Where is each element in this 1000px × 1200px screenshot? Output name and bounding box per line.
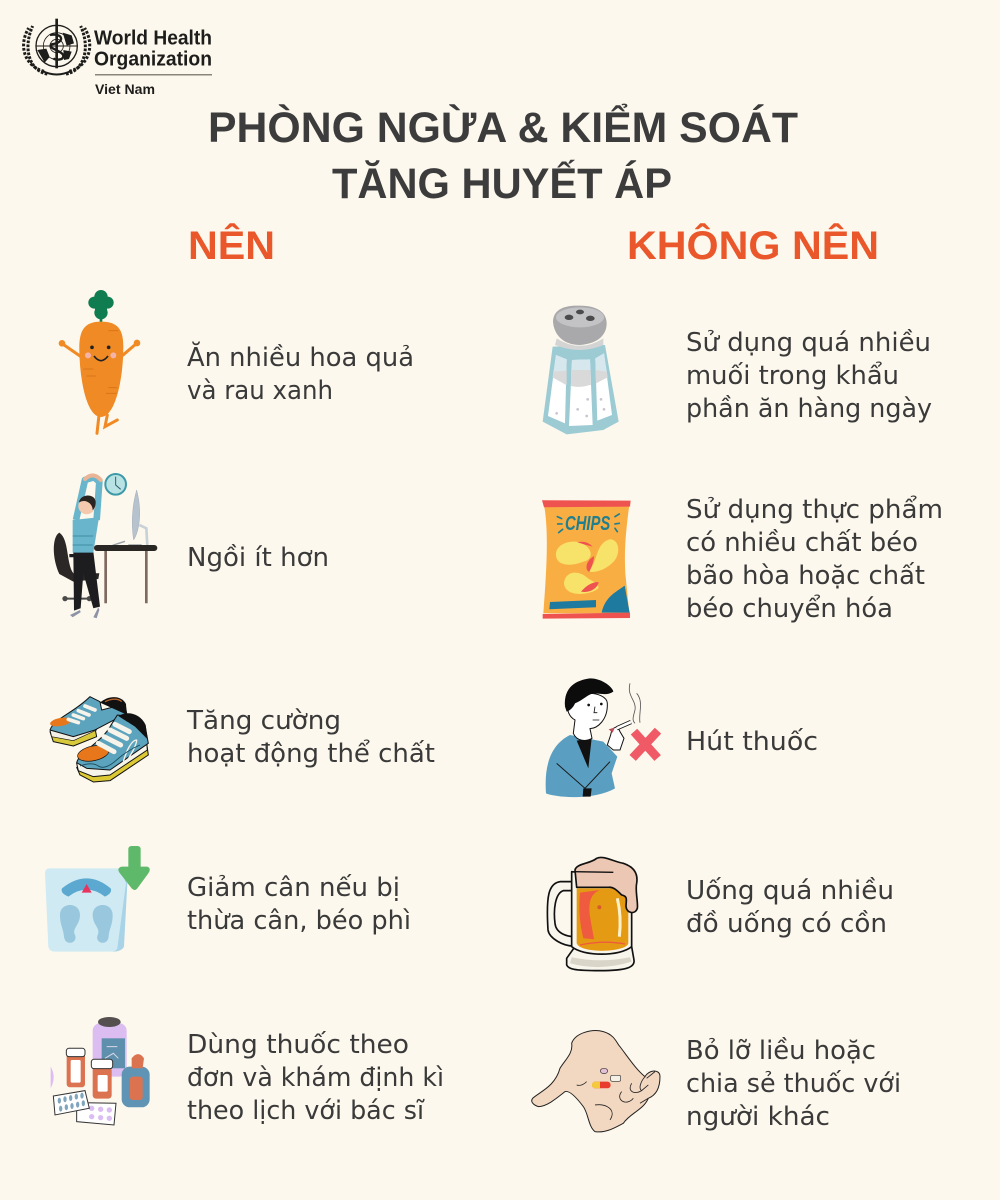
icon: salt shaker (543, 306, 619, 434)
text: eat fruit and vegetables (187, 340, 414, 406)
text: take medicine and check-ups (187, 1030, 444, 1126)
WHO logo: Viet Nam (95, 81, 155, 97)
text: increase physical activity: hoạt động thể chất (187, 738, 435, 769)
text: missed doses or sharing medicine: Bỏ lỡ liều hoặc (686, 1036, 876, 1066)
text: saturated and trans fats: béo chuyển hóa (686, 593, 893, 624)
icon: medicine bottles (51, 1017, 150, 1125)
text: increase physical activity (186, 706, 435, 769)
icon: WHO emblem (24, 19, 90, 74)
text: too much salt: Sử dụng quá nhiều (686, 328, 931, 358)
text: saturated and trans fats: Sử dụng thực phẩm (686, 494, 943, 525)
text: eat fruit and vegetables: Ăn nhiều hoa quả (187, 340, 414, 373)
WHO logo: Organization (94, 48, 212, 70)
text: missed doses or sharing medicine (686, 1036, 901, 1132)
text: take medicine and check-ups: Dùng thuốc theo (187, 1030, 409, 1060)
text: lose weight: thừa cân, béo phì (187, 906, 411, 936)
icon: chips bag: CHIPS (565, 513, 611, 535)
text: saturated and trans fats: bão hòa hoặc chất (686, 561, 925, 591)
organization name: World Health (94, 28, 212, 50)
text: increase physical activity: Tăng cường (186, 706, 341, 736)
text: saturated and trans fats: có nhiều chất béo (686, 528, 918, 558)
text: sit less: Ngồi ít hơn (187, 543, 329, 573)
icon: running shoes (49, 697, 148, 782)
icon: man stretching at desk (54, 474, 157, 618)
text: missed doses or sharing medicine: chia sẻ thuốc với (686, 1069, 901, 1099)
title: PHÒNG NGỪA & KIỂM SOÁT (208, 103, 798, 152)
text: too much alcohol: đồ uống có cồn (686, 909, 887, 939)
icon: carrot (59, 290, 140, 433)
icon: hand holding pills (532, 1031, 660, 1132)
text: smoking: Hút thuốc (686, 727, 818, 757)
text: lose weight: Giảm cân nếu bị (187, 873, 400, 903)
text: too much salt (686, 328, 932, 424)
icon: person smoking with cross (546, 678, 658, 797)
text: take medicine and check-ups: theo lịch với bác sĩ (187, 1096, 425, 1126)
text: too much salt: muối trong khẩu (686, 360, 899, 391)
title: TĂNG HUYẾT ÁP (332, 160, 672, 208)
panel: do list (45, 222, 444, 1126)
text: missed doses or sharing medicine: người khác (686, 1102, 830, 1132)
icon: chips bag (542, 500, 631, 619)
icon: beer mug (547, 857, 638, 971)
heading: do not: KHÔNG NÊN (627, 222, 879, 268)
panel: do not list (532, 222, 943, 1132)
text: too much salt: phần ăn hàng ngày (686, 394, 932, 424)
icon: weighing scale with arrow (45, 846, 150, 952)
text: saturated and trans fats (686, 494, 943, 624)
text: too much alcohol (686, 876, 894, 939)
text: too much alcohol: Uống quá nhiều (686, 876, 894, 906)
text: take medicine and check-ups: đơn và khám định kì (187, 1063, 444, 1093)
heading: do: NÊN (188, 222, 275, 268)
WHO logo (24, 19, 212, 97)
text: lose weight (187, 873, 411, 936)
title (208, 103, 798, 208)
text: eat fruit and vegetables: và rau xanh (187, 376, 333, 406)
